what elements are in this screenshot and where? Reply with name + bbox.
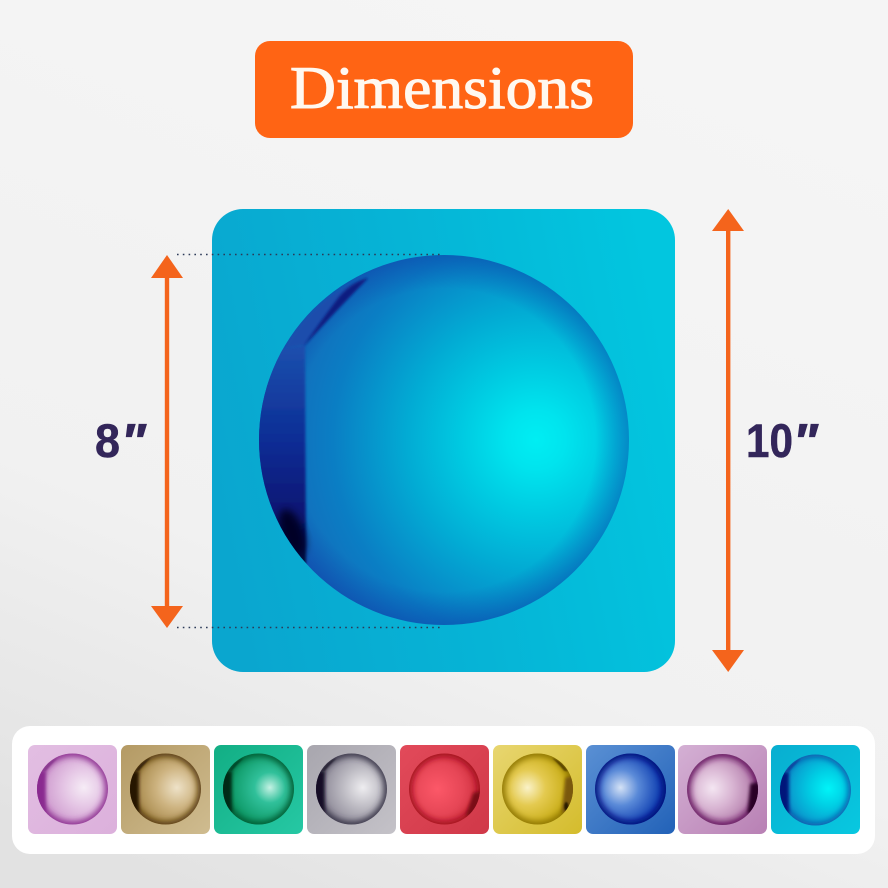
label: 8 inches: 8 <box>95 414 120 467</box>
swatch: gold <box>121 745 210 834</box>
dotted guide: bottom of dome <box>177 626 442 628</box>
swatch: yellow <box>493 745 582 834</box>
swatch: grey <box>307 745 396 834</box>
swatch: green <box>214 745 303 834</box>
swatch: pink <box>28 745 117 834</box>
dotted guide: top of dome <box>177 254 442 256</box>
product: large teal mat with concave dome <box>212 209 675 672</box>
label: 10 inches: 10 <box>746 414 793 467</box>
dome <box>244 255 629 625</box>
arrow: 8 inch dome height <box>151 255 183 628</box>
swatch: blue <box>586 745 675 834</box>
title text: Dimensions <box>290 55 594 121</box>
label: 10 inches: ″ <box>794 414 819 467</box>
label: 8 inches: ″ <box>122 414 147 467</box>
panel: colour options <box>12 726 875 854</box>
swatch: mauve <box>678 745 767 834</box>
title badge <box>255 41 633 138</box>
swatch: teal <box>771 745 860 834</box>
arrow: 10 inch mat height <box>712 209 744 672</box>
swatch: red <box>400 745 489 834</box>
